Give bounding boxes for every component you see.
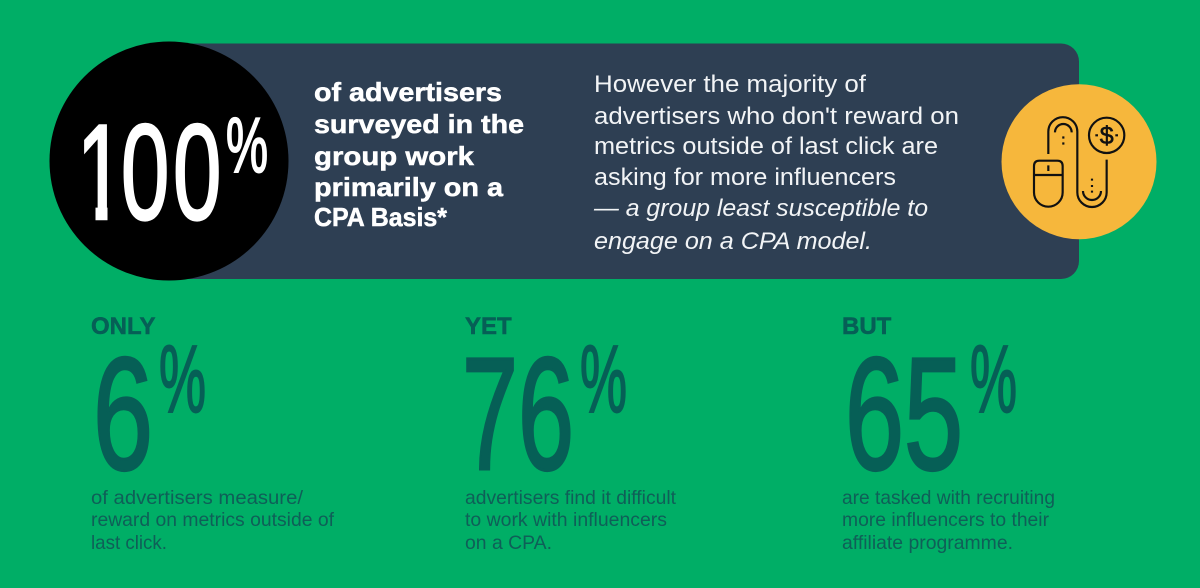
text: bold lead statement: primarily on a <box>314 172 504 202</box>
stat: yet 76 percent: % <box>580 326 627 433</box>
text: majority of advertisers note: — a group least susceptible to <box>593 195 928 222</box>
text: majority of advertisers note: engage on a CPA model. <box>594 228 872 255</box>
text: majority of advertisers note: advertisers who don't reward on <box>594 103 959 130</box>
stat: yet 76 percent: to work with influencers <box>465 509 667 531</box>
stat: but 65 percent: 65 <box>845 324 963 503</box>
stat: only 6 percent: of advertisers measure/ <box>91 487 304 509</box>
text: majority of advertisers note: metrics outside of last click are <box>594 133 938 160</box>
stat: only 6 percent: last click. <box>91 532 167 554</box>
text: majority of advertisers note: asking for more influencers <box>594 164 896 191</box>
icon: mouse and dollar coin on yellow circle <box>1002 84 1156 239</box>
stat: but 65 percent <box>842 313 1055 554</box>
panel: headline banner <box>50 42 1079 280</box>
stat: only 6 percent <box>91 313 335 554</box>
circle: 100 percent stat: % <box>226 101 268 189</box>
stat: only 6 percent: 6 <box>93 324 153 503</box>
stat: only 6 percent: ONLY <box>91 313 155 340</box>
stat: but 65 percent: % <box>970 326 1017 433</box>
text: bold lead statement: group work <box>314 141 475 171</box>
stat: yet 76 percent: 76 <box>462 324 574 503</box>
text: bold lead statement: CPA Basis* <box>314 202 448 232</box>
stat: yet 76 percent: advertisers find it difficult <box>465 487 677 509</box>
text: bold lead statement: surveyed in the <box>314 109 524 139</box>
text: bold lead statement <box>314 77 524 232</box>
circle: 100 percent stat <box>50 42 288 280</box>
stat: but 65 percent: BUT <box>842 313 892 340</box>
stat: yet 76 percent: on a CPA. <box>465 532 552 554</box>
circle: 100 percent stat: 100 <box>77 98 221 249</box>
stat: but 65 percent: are tasked with recruiting <box>842 487 1055 509</box>
text: majority of advertisers note <box>593 71 959 255</box>
stat: but 65 percent: affiliate programme. <box>842 532 1013 554</box>
stat: yet 76 percent: YET <box>465 313 512 340</box>
stat: but 65 percent: more influencers to their <box>842 509 1049 531</box>
stat: only 6 percent: % <box>159 326 206 433</box>
icon: mouse and dollar coin on yellow circle: $ <box>1100 122 1114 150</box>
text: bold lead statement: of advertisers <box>314 77 502 107</box>
stat: only 6 percent: reward on metrics outside of <box>91 509 335 531</box>
text: majority of advertisers note: However the majority of <box>594 71 866 98</box>
stat: yet 76 percent <box>462 313 677 554</box>
